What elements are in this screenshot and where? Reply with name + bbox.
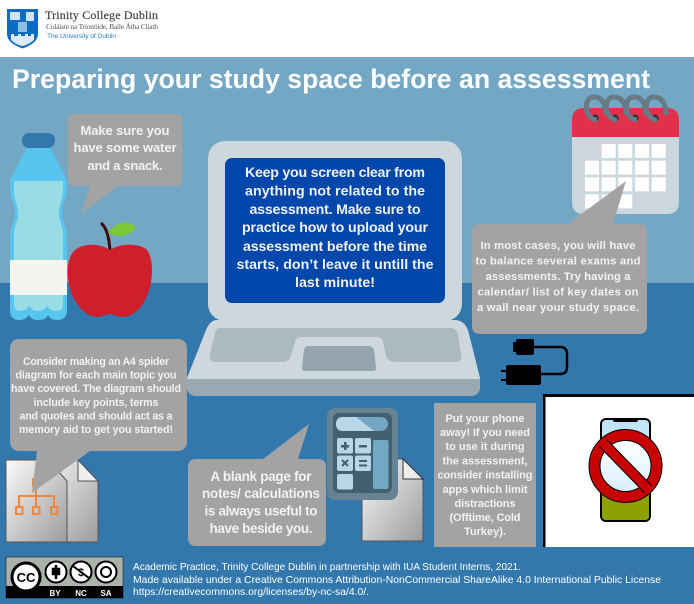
icon: phone [600, 418, 651, 522]
callout: put phone away: distractions [454, 498, 516, 510]
callout: put phone away: to use it during [446, 441, 524, 453]
callout: blank page: have beside you. [210, 521, 312, 536]
footer credits: https://creativecommons.org/licenses/by-nc-sa/4.0/. [133, 587, 369, 598]
icon: blank page [362, 459, 423, 541]
screen text: assessment. Make sure to [250, 202, 421, 218]
icon: documents with spider diagram [6, 460, 98, 542]
callout: calendar advice: a wall near your study space. [477, 302, 639, 314]
icon: apple [68, 222, 152, 317]
screen text: assessment before the time [243, 239, 427, 255]
icon: laptop [187, 141, 480, 396]
callout: spider diagram [10, 339, 187, 493]
screen text: anything not related to the [245, 184, 425, 200]
callout: calendar advice: to balance several exams and [476, 256, 641, 268]
callout: blank page [188, 424, 326, 546]
footer credits: Made available under a Creative Commons Attribution-NonCommercial ShareAlike 4.0 International Public License [133, 575, 661, 586]
logo text: Trinity College Dublin [45, 8, 158, 22]
icon: creative commons badge: NC [75, 589, 87, 598]
icon: calculator [327, 408, 398, 500]
callout: spider diagram: have covered. The diagram should [11, 383, 181, 395]
spider diagram [16, 479, 58, 514]
callout: spider diagram: include key points, terms [34, 397, 159, 409]
callout: put phone away: the assessment, [442, 456, 528, 468]
screen text: Keep you screen clear from [245, 165, 425, 181]
callout: blank page: is always useful to [204, 504, 318, 518]
callout: spider diagram: and quotes and should act as a [20, 410, 174, 422]
title: Preparing your study space before an assessment [12, 64, 650, 94]
callout: put phone away: (Offtime, Cold [450, 512, 520, 524]
logo text: The University of Dublin [47, 33, 116, 40]
icon: creative commons badge: BY [49, 589, 61, 598]
icon: creative commons badge [6, 557, 123, 598]
callout: blank page: notes/ calculations [202, 486, 320, 501]
callout: put phone away: consider installing [438, 470, 532, 482]
icon: water bottle [10, 133, 67, 320]
callout: put phone away: apps which limit [442, 484, 528, 496]
screen text: last minute! [295, 275, 375, 291]
callout: water and snack [68, 114, 182, 214]
callout: water and snack: Make sure you [80, 123, 170, 138]
callout: put phone away: away! If you need [440, 427, 530, 439]
callout: spider diagram: diagram for each main topic you [16, 370, 176, 382]
callout: water and snack: and a snack. [88, 158, 162, 173]
logo text: Coláiste na Tríonóide, Baile Átha Cliath [46, 21, 158, 31]
callout: spider diagram: memory aid to get you started! [19, 424, 173, 436]
footer credits: Academic Practice, Trinity College Dublin in partnership with IUA Student Interns, 2021. [133, 562, 521, 573]
panel: phone prohibited [543, 394, 694, 547]
callout: water and snack: have some water [74, 140, 176, 155]
icon: calendar [572, 97, 679, 214]
callout: calendar advice: In most cases, you will have [480, 240, 636, 252]
footer credits [133, 562, 661, 598]
callout: calendar advice: assessments. Try having a [486, 271, 631, 283]
icon: prohibition sign [594, 435, 656, 497]
laptop base [187, 320, 480, 396]
callout: calendar advice [472, 181, 647, 334]
icon: charger cable [501, 339, 567, 385]
logo text [45, 8, 158, 40]
icon: creative commons badge: CC [17, 570, 36, 585]
screen text: practice how to upload your [242, 220, 428, 236]
callout: blank page: A blank page for [210, 469, 312, 484]
screen text: starts, don’t leave it untill the [236, 257, 434, 273]
icon: creative commons badge: $ [78, 567, 84, 579]
laptop screen [225, 158, 445, 303]
header logo [7, 8, 158, 48]
callout: put phone away: Turkey). [464, 526, 506, 538]
icon: crest shield [7, 9, 38, 48]
icon: creative commons badge: SA [100, 589, 112, 598]
screen text [236, 165, 434, 291]
callout: calendar advice: calendar/ list of key dates on [478, 286, 639, 298]
callout: spider diagram: Consider making an A4 spider [23, 356, 169, 368]
callout: put phone away [434, 403, 536, 547]
callout: put phone away: Put your phone [446, 413, 524, 425]
